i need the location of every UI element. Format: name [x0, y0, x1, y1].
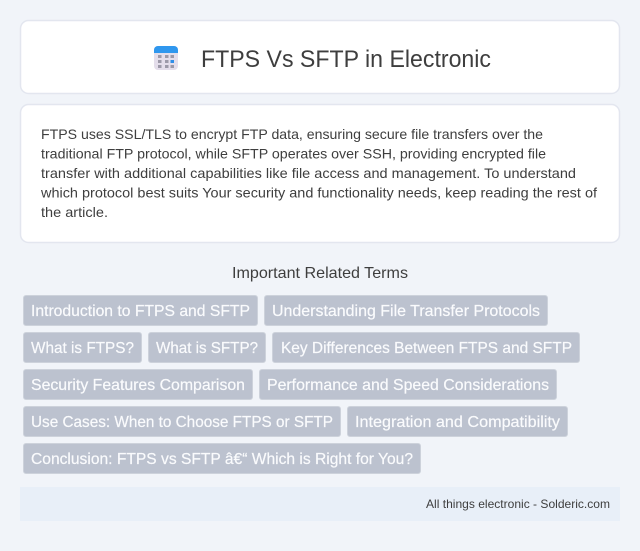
tag: introduction: Introduction to FTPS and SFTP	[31, 303, 250, 320]
tag: what is SFTP: What is SFTP?	[156, 340, 258, 357]
text block: introduction paragraph: the article.	[41, 204, 108, 220]
text block: introduction paragraph: FTPS uses SSL/TLS to encrypt FTP data, ensuring secure file transfers over the	[41, 126, 543, 142]
footer	[20, 487, 620, 521]
tag: performance: Performance and Speed Considerations	[267, 377, 549, 394]
text block: introduction paragraph: traditional FTP protocol, while SFTP operates over SSH, providing encrypted file	[41, 146, 546, 162]
tag: use cases: Use Cases: When to Choose FTPS or SFTP	[31, 414, 333, 431]
tag: what is FTPS: What is FTPS?	[31, 340, 134, 357]
tag: what is FTPS	[24, 332, 142, 362]
panel: introduction	[20, 104, 620, 242]
tag: integration	[348, 406, 568, 436]
tag: performance	[260, 370, 556, 400]
tag: understanding protocols	[264, 296, 548, 326]
tag: security features	[24, 370, 252, 400]
tag: conclusion: Conclusion: FTPS vs SFTP â€“ Which is Right for You?	[31, 451, 413, 468]
panel: header	[20, 20, 620, 94]
tag: key differences	[272, 332, 580, 362]
text block: introduction paragraph: which protocol best suits Your security and functionality needs, keep reading the rest of	[40, 184, 597, 200]
tag: key differences: Key Differences Between FTPS and SFTP	[281, 340, 572, 357]
tag: introduction	[24, 296, 258, 326]
tags: related terms	[24, 296, 580, 474]
title: FTPS Vs SFTP in Electronic	[201, 46, 491, 73]
tag: what is SFTP	[148, 332, 266, 362]
heading: important related terms: Important Related Terms	[232, 265, 408, 282]
text block: introduction paragraph: transfer with additional capabilities like file access and management. To understand	[41, 165, 576, 181]
footer: All things electronic - Solderic.com	[426, 497, 610, 511]
tag: security features: Security Features Comparison	[31, 377, 245, 394]
tag: use cases	[24, 406, 340, 436]
text block: introduction paragraph	[40, 126, 597, 220]
icon: calendar	[154, 46, 178, 70]
tag: understanding protocols: Understanding File Transfer Protocols	[272, 303, 540, 320]
tag: integration: Integration and Compatibility	[355, 414, 560, 431]
tag: conclusion	[24, 444, 420, 474]
